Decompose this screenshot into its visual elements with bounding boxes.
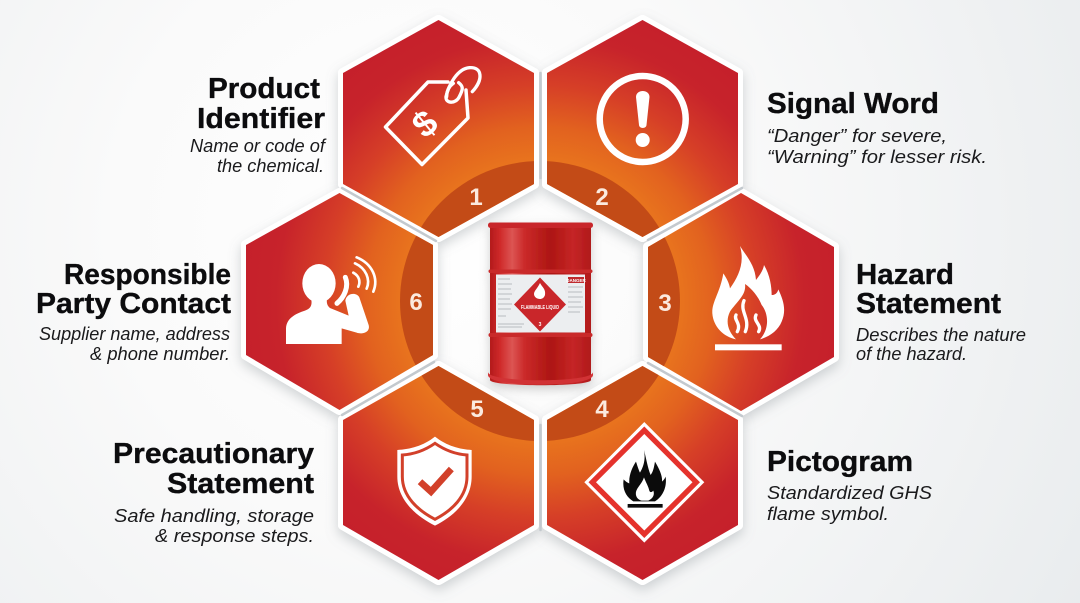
text: precautionary statement: Statement (167, 468, 314, 500)
panel 5: precautionary statement hexagon: 5 (470, 396, 484, 423)
text: signal word: Signal Word (767, 88, 939, 120)
panel 6: responsible party contact hexagon: 6 (409, 289, 423, 316)
text: precautionary statement: & response steps. (155, 526, 314, 546)
text: pictogram: Pictogram (767, 446, 913, 478)
text: signal word (767, 88, 987, 167)
text: product identifier: the chemical. (217, 156, 324, 176)
text: product identifier: Identifier (197, 103, 325, 135)
text: hazard statement: Describes the nature (856, 325, 1026, 345)
text: pictogram: Standardized GHS (767, 483, 932, 503)
panel 2: signal word hexagon (547, 20, 738, 237)
panel 5: precautionary statement hexagon (343, 366, 534, 580)
text: hazard statement (856, 259, 1026, 364)
text: responsible party contact: Supplier name, address (39, 324, 230, 344)
icon: shield with check (397, 437, 472, 526)
text: hazard statement: Statement (856, 288, 1001, 320)
icon: person on phone (286, 257, 375, 344)
panel 2: signal word hexagon: 2 (595, 184, 609, 211)
icon: fire (712, 246, 784, 350)
text: precautionary statement (113, 438, 314, 546)
drum label: DANGER (566, 278, 586, 283)
text: product identifier: Product (208, 73, 320, 105)
text: precautionary statement: Precautionary (113, 438, 314, 470)
text: product identifier (190, 73, 327, 176)
text: pictogram: flame symbol. (767, 504, 889, 524)
drum label: FLAMMABLE LIQUID (521, 305, 559, 311)
panel 4: pictogram hexagon: 4 (595, 396, 609, 423)
text: precautionary statement: Safe handling, storage (114, 506, 314, 526)
text: responsible party contact: & phone number. (90, 344, 230, 364)
white hexagon borders with shadow (246, 20, 834, 580)
icon: price tag (386, 68, 480, 164)
panel 3: hazard statement hexagon (648, 193, 834, 411)
icon: GHS flame diamond (584, 422, 704, 543)
text: pictogram (767, 446, 932, 524)
drum top rim (488, 222, 593, 228)
text: product identifier: Name or code of (190, 136, 327, 156)
text: hazard statement: Hazard (856, 259, 954, 291)
text: signal word: “Danger” for severe, (767, 126, 947, 146)
panel 6: responsible party contact hexagon (246, 193, 433, 410)
text: responsible party contact: Party Contact (36, 288, 231, 320)
drum label (496, 274, 586, 332)
seams between hexagons (342, 73, 742, 530)
panel 1: product identifier hexagon: 1 (469, 184, 483, 211)
drum bottom rim (488, 372, 593, 385)
panel 1: product identifier hexagon (343, 20, 534, 237)
text: responsible party contact: Responsible (64, 259, 231, 291)
red chemical drum (488, 222, 593, 385)
drum label: 3 (539, 322, 542, 328)
panel 4: pictogram hexagon (547, 366, 738, 580)
icon: exclamation circle (600, 76, 686, 162)
text: hazard statement: of the hazard. (856, 344, 967, 364)
text: responsible party contact (36, 259, 231, 364)
text: signal word: “Warning” for lesser risk. (767, 147, 987, 167)
panel 3: hazard statement hexagon: 3 (658, 290, 672, 317)
icon: price tag: $ (404, 101, 446, 146)
